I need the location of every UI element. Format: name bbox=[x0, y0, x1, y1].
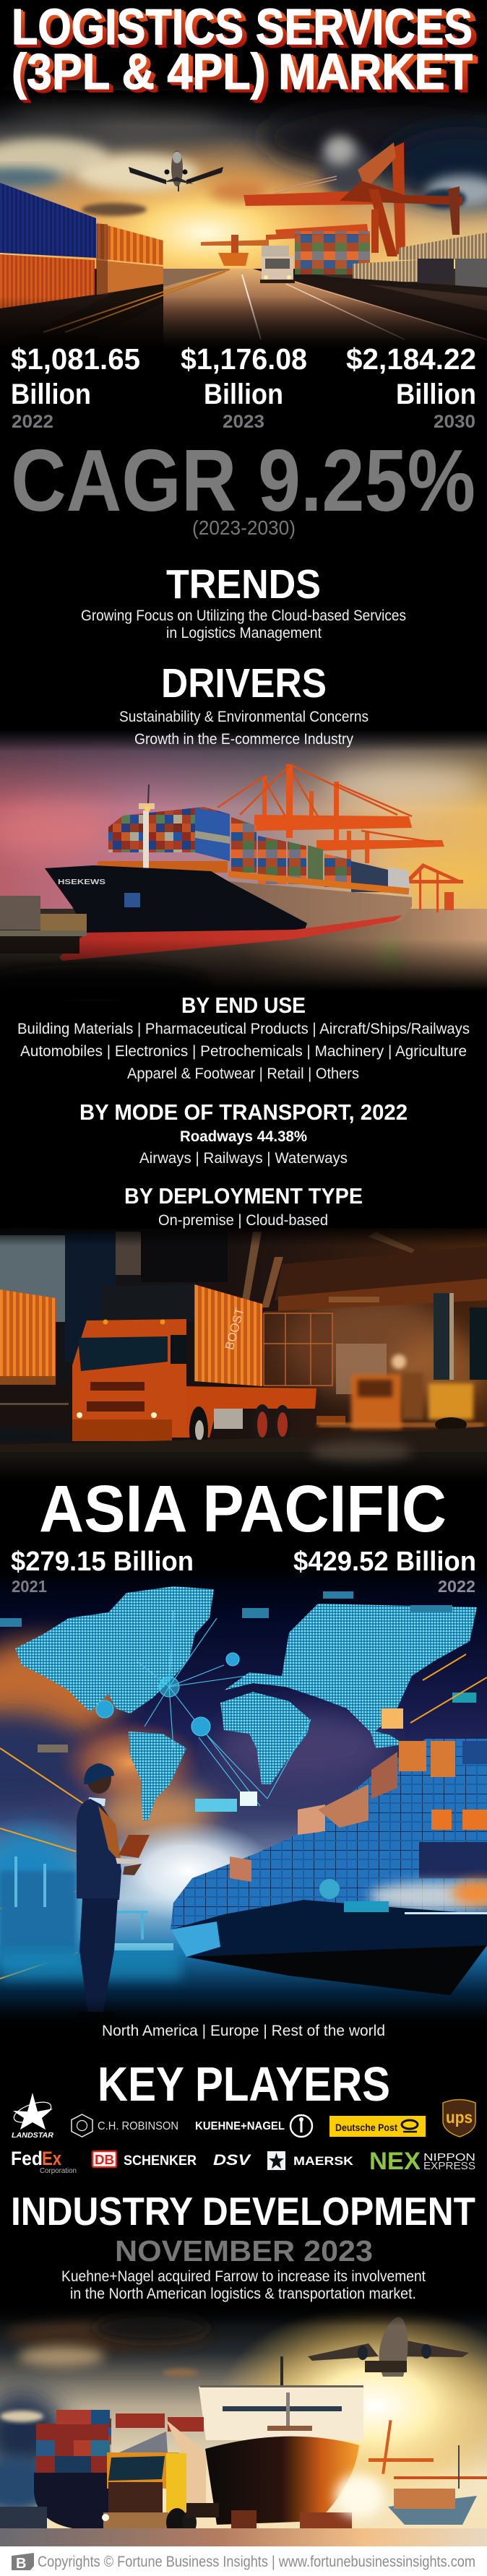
ship hull: HSEKEWS bbox=[58, 878, 105, 886]
container yard bbox=[295, 231, 487, 296]
logo: C.H. Robinson: C.H. ROBINSON bbox=[98, 2120, 178, 2132]
logo: Kuehne+Nagel: KUEHNE+NAGEL bbox=[195, 2120, 285, 2132]
logo: Nippon Express: NIPPON bbox=[423, 2151, 475, 2164]
by deployment type bbox=[124, 1183, 363, 1229]
apron bbox=[0, 2474, 487, 2546]
distant ship bbox=[218, 235, 249, 266]
icon: airplane bbox=[129, 150, 223, 191]
logo: DSV: DSV bbox=[213, 2152, 251, 2169]
industry development bbox=[11, 2189, 475, 2302]
callout tags bbox=[0, 1591, 476, 1812]
logo: Landstar bbox=[12, 2093, 54, 2140]
logo: C.H. Robinson bbox=[72, 2114, 178, 2137]
market size 2023: 2023 bbox=[223, 412, 264, 432]
person with laptop bbox=[77, 1763, 150, 2019]
network hub bbox=[96, 1611, 311, 1806]
by mode of transport bbox=[79, 1099, 408, 1167]
logo: Nippon Express: NEX bbox=[369, 2148, 421, 2175]
Asia Pacific values: 2022 bbox=[438, 1577, 475, 1596]
trends: Growing Focus on Utilizing the Cloud-based Services bbox=[81, 608, 406, 624]
left container bbox=[0, 1289, 69, 1428]
by end use bbox=[17, 993, 470, 1082]
market size 2023: $1,176.08 bbox=[181, 342, 307, 376]
market size 2030: 2030 bbox=[434, 412, 475, 432]
harbour skyline bbox=[0, 1857, 181, 1979]
logo: FedEx bbox=[11, 2148, 77, 2175]
logo: DB Schenker: SCHENKER bbox=[124, 2153, 197, 2169]
by end use: Automobiles | Electronics | Petrochemicals | Machinery | Agriculture bbox=[20, 1043, 467, 1060]
key players heading: KEY PLAYERS bbox=[98, 2057, 390, 2112]
road surface bbox=[0, 1427, 487, 1482]
by mode of transport: Airways | Railways | Waterways bbox=[139, 1150, 348, 1167]
dock bbox=[0, 896, 87, 954]
logo: Kuehne+Nagel bbox=[195, 2115, 312, 2137]
container ship bbox=[171, 1739, 487, 1995]
logo: Nippon Express: EXPRESS bbox=[423, 2160, 475, 2172]
ship hull bbox=[45, 865, 412, 961]
logo: Maersk bbox=[267, 2151, 354, 2170]
overhead gantry bbox=[242, 1232, 487, 1394]
trends bbox=[81, 561, 406, 641]
logo: Deutsche Post bbox=[329, 2116, 426, 2137]
trends: in Logistics Management bbox=[166, 625, 322, 641]
delivery truck bbox=[260, 246, 295, 283]
yellow truck bbox=[102, 2420, 352, 2537]
container ship image bbox=[0, 730, 487, 1000]
dotted map bbox=[15, 1586, 477, 1820]
hero image: airport, port and road at sunset bbox=[0, 90, 487, 350]
logo: DB Schenker bbox=[92, 2151, 197, 2169]
market size 2030 bbox=[346, 342, 476, 432]
Asia Pacific heading: ASIA PACIFIC bbox=[39, 1472, 447, 1546]
world map and logistics manager image bbox=[0, 1560, 487, 2031]
Asia Pacific values bbox=[11, 1547, 476, 1596]
multimodal transport image bbox=[0, 2304, 487, 2546]
orange connection lines bbox=[0, 1654, 487, 1979]
market size 2022: 2022 bbox=[12, 412, 53, 432]
title bbox=[12, 0, 478, 103]
background trucks bbox=[318, 1354, 484, 1432]
by deployment type: On-premise | Cloud-based bbox=[158, 1212, 328, 1229]
far cranes bbox=[405, 863, 463, 912]
mast bbox=[139, 785, 155, 868]
by end use: Apparel & Footwear | Retail | Others bbox=[127, 1066, 359, 1082]
by mode of transport: Roadways 44.38% bbox=[180, 1128, 307, 1145]
by mode of transport: BY MODE OF TRANSPORT, 2022 bbox=[79, 1099, 408, 1125]
market size 2022 bbox=[11, 342, 140, 432]
logo: FedEx: Fed bbox=[11, 2148, 43, 2169]
logo: Maersk: MAERSK bbox=[293, 2154, 354, 2168]
market size 2022: $1,081.65 bbox=[11, 342, 140, 376]
ground and road bbox=[0, 269, 487, 348]
airplane bbox=[308, 2317, 469, 2377]
drivers: DRIVERS bbox=[161, 660, 327, 706]
logo: DB Schenker: DB bbox=[95, 2153, 114, 2167]
by deployment type: BY DEPLOYMENT TYPE bbox=[124, 1183, 363, 1209]
logo: UPS bbox=[443, 2099, 475, 2137]
market size 2030: $2,184.22 bbox=[346, 342, 476, 376]
industry development: in the North American logistics & transportation market. bbox=[70, 2286, 416, 2302]
Asia Pacific values: $279.15 Billion bbox=[11, 1547, 194, 1577]
drivers bbox=[119, 660, 369, 748]
logo: UPS: ups bbox=[446, 2108, 473, 2127]
by end use: BY END USE bbox=[181, 993, 306, 1018]
main truck bbox=[72, 1284, 345, 1454]
other regions: North America | Europe | Rest of the world bbox=[102, 2023, 385, 2039]
drivers: Growth in the E-commerce Industry bbox=[134, 731, 353, 748]
industry development: Kuehne+Nagel acquired Farrow to increase its involvement bbox=[61, 2268, 426, 2285]
market size 2022: Billion bbox=[11, 379, 91, 410]
icon: Fortune Business Insights logo bbox=[12, 2553, 34, 2572]
by end use: Building Materials | Pharmaceutical Products | Aircraft/Ships/Railways bbox=[17, 1021, 470, 1037]
logo: Nippon Express bbox=[369, 2148, 475, 2175]
ship hull bbox=[205, 2437, 359, 2525]
industry development: NOVEMBER 2023 bbox=[115, 2234, 373, 2268]
main truck: BOOST bbox=[223, 1306, 247, 1352]
ship superstructure bbox=[199, 2356, 363, 2440]
icon: Fortune Business Insights logo: B bbox=[16, 2556, 26, 2572]
container stacks bbox=[98, 807, 410, 896]
Asia Pacific values: $429.52 Billion bbox=[293, 1547, 476, 1577]
CAGR: (2023-2030) bbox=[192, 517, 296, 539]
containers bbox=[34, 2410, 204, 2528]
truck image bbox=[0, 1224, 487, 1482]
port cranes bbox=[201, 142, 462, 256]
market size 2023 bbox=[181, 342, 307, 432]
drivers: Sustainability & Environmental Concerns bbox=[119, 709, 369, 725]
footer copyright bar bbox=[0, 2546, 487, 2576]
market size 2030: Billion bbox=[396, 379, 476, 410]
logo: Landstar: LANDSTAR bbox=[12, 2132, 54, 2140]
Asia Pacific values: 2021 bbox=[12, 1577, 47, 1596]
shipping containers left bbox=[0, 183, 163, 308]
right background ship and cranes bbox=[369, 2420, 487, 2525]
trends: TRENDS bbox=[166, 561, 321, 608]
market size 2023: Billion bbox=[204, 379, 283, 410]
logo: FedEx: Corporation bbox=[40, 2167, 77, 2175]
logo: FedEx: Ex bbox=[42, 2148, 61, 2169]
logo: Deutsche Post: Deutsche Post bbox=[335, 2122, 397, 2133]
cranes bbox=[217, 764, 444, 863]
